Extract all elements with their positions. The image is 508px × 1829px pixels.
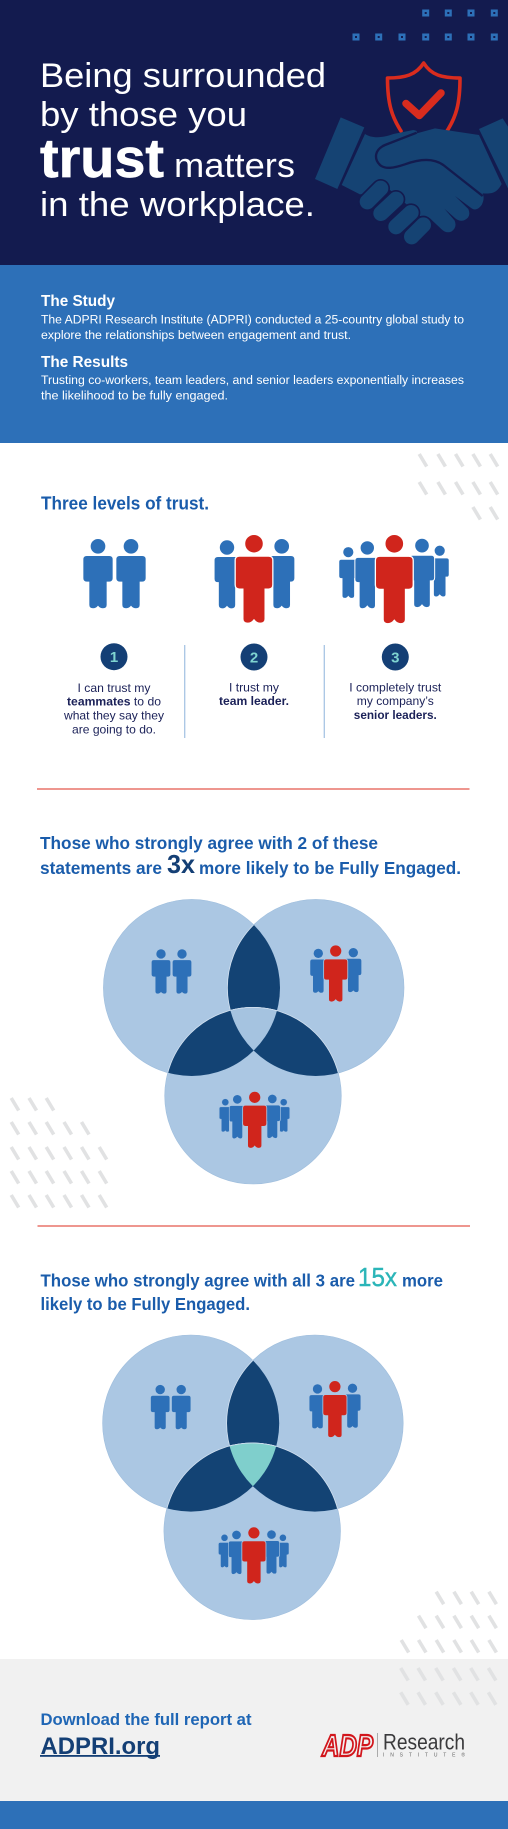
link: ADPRI.org: ADPRI.org (40, 1733, 160, 1760)
level 1 column (63, 539, 164, 736)
heading: 3x more likely: Those who strongly agree with 2 of these (40, 833, 378, 853)
text: results description: the likelihood to be fully engaged. (41, 388, 228, 402)
icon: handshake (315, 117, 508, 237)
text: level 2 statement: I trust my (229, 680, 279, 694)
footer panel (0, 1659, 508, 1801)
text: level 3 statement (349, 680, 442, 722)
title: matters (174, 147, 295, 185)
icon: team leader group (215, 534, 294, 623)
heading: 3x more likely: 3x (167, 849, 196, 879)
text: level 2 statement (219, 680, 289, 708)
text: results description (41, 373, 464, 402)
icon: senior leader group (218, 1527, 289, 1584)
heading: 15x more likely: Those who strongly agree with all 3 are (40, 1271, 355, 1291)
text: study description (41, 313, 464, 342)
logo: ADP Research Institute: Research (383, 1729, 465, 1754)
logo: ADP Research Institute: INSTITUTE® (383, 1752, 465, 1758)
title: in the workplace. (40, 186, 315, 224)
text: results description: Trusting co-workers, team leaders, and senior leaders exponentially increases (41, 373, 464, 387)
text: study description: explore the relationships between engagement and trust. (41, 328, 351, 342)
venn diagram: all three statements (103, 1335, 403, 1620)
icon: two teammates (83, 539, 146, 608)
icon: senior leader group (339, 534, 449, 624)
badge 1 (100, 643, 128, 670)
badge 2: 2 (250, 649, 258, 666)
title: Being surrounded (40, 57, 326, 95)
text: level 1 statement (63, 681, 164, 736)
icon: shield with check mark (388, 63, 460, 131)
title (40, 57, 326, 224)
text: level 1 statement: I can trust my (78, 681, 150, 695)
icon: two teammates (152, 949, 191, 994)
heading: 3x more likely: more likely to be Fully Engaged. (199, 858, 461, 878)
text: level 2 statement: team leader. (219, 694, 289, 708)
decorative dot grid (352, 10, 498, 40)
text: level 1 statement: are going to do. (72, 722, 156, 736)
header panel (0, 0, 508, 265)
text: level 3 statement: my company’s (357, 694, 434, 708)
heading: 15x more likely: more (402, 1271, 443, 1291)
panel: study and results (0, 265, 508, 443)
text: level 3 statement: senior leaders. (354, 708, 437, 722)
heading: 15x more likely: likely to be Fully Engaged. (40, 1294, 250, 1314)
heading: The Study: The Study (41, 293, 115, 310)
badge 2 (240, 644, 268, 670)
logo: ADP Research Institute: ADP (321, 1728, 373, 1763)
badge 1: 1 (110, 649, 118, 666)
text: level 3 statement: I completely trust (349, 680, 442, 694)
title: by those you (40, 96, 247, 134)
badge 3: 3 (391, 649, 399, 666)
icon: two teammates (151, 1385, 191, 1429)
logo: ADP Research Institute (321, 1728, 465, 1763)
heading: 15x more likely (40, 1262, 443, 1314)
heading: 3x more likely (40, 833, 461, 879)
text: level 1 statement: teammates to do (67, 695, 161, 709)
text: level 1 statement: what they say they (63, 708, 164, 722)
footer blue band (0, 1801, 508, 1829)
heading: three levels of trust: Three levels of trust. (41, 493, 209, 513)
heading: 15x more likely: 15x (358, 1262, 397, 1292)
call to action: download: Download the full report at (40, 1711, 252, 1729)
icon: senior leader group (219, 1091, 290, 1148)
icon: team leader group (309, 1381, 361, 1438)
heading: The Results: The Results (41, 354, 128, 371)
title: trust (40, 127, 164, 189)
text: study description: The ADPRI Research Institute (ADPRI) conducted a 25-country global study to (41, 313, 464, 327)
level 2 column (215, 534, 294, 708)
badge 3 (382, 644, 409, 670)
icon: team leader group (310, 945, 361, 1002)
venn diagram: two statements (103, 899, 404, 1184)
heading: 3x more likely: statements are (40, 858, 162, 878)
level 3 column (339, 534, 449, 722)
